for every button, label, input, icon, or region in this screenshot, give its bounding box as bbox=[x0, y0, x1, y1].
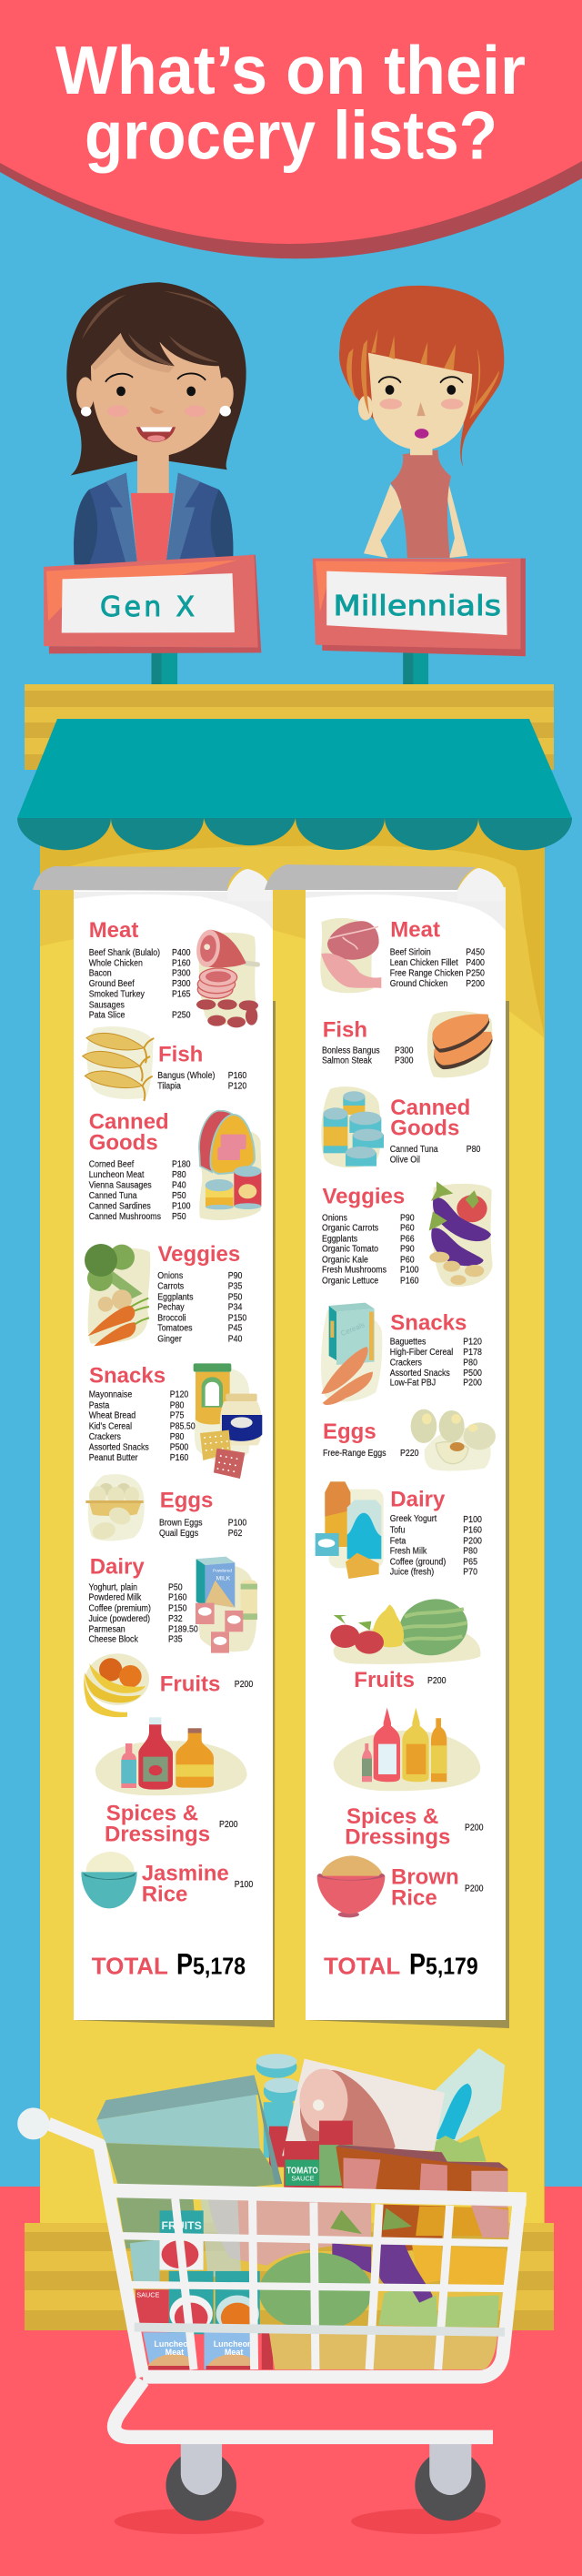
section: Fruits: Fruits bbox=[160, 1672, 220, 1696]
section: Fruits: P200 bbox=[235, 1679, 254, 1690]
sign: Gen X bbox=[44, 555, 261, 684]
section: Fish: P300 bbox=[395, 1046, 414, 1056]
section: Snacks: Baguettes bbox=[390, 1337, 426, 1348]
section: Spices & Dressings: P200 bbox=[219, 1819, 238, 1830]
section: Veggies: P60 bbox=[400, 1223, 415, 1234]
section: Snacks: P120 bbox=[463, 1337, 482, 1348]
section: Dairy bbox=[316, 1481, 482, 1579]
section: Meat: Beef Sirloin bbox=[390, 947, 431, 958]
section: Veggies: P100 bbox=[400, 1265, 419, 1276]
section: Veggies: P50 bbox=[228, 1292, 243, 1303]
icon: eggplants, tomato and mushrooms bbox=[429, 1181, 493, 1287]
section: Dairy: Powdered Milk bbox=[89, 1592, 141, 1603]
section: Snacks: Assorted Snacks bbox=[89, 1442, 149, 1453]
section: Canned Goods: P180 bbox=[172, 1159, 191, 1170]
sign: Millennials: Millennials bbox=[333, 591, 501, 622]
icon: bowl of brown rice bbox=[317, 1855, 385, 1917]
total: Gen X: P bbox=[176, 1947, 193, 1980]
character: Millennial woman bbox=[339, 286, 504, 558]
section: Snacks: P500 bbox=[170, 1442, 189, 1453]
section: Dairy: Juice (fresh) bbox=[390, 1567, 434, 1578]
section: Spices & Dressings bbox=[345, 1804, 484, 1850]
icon: cereal box and baguettes bbox=[321, 1303, 382, 1405]
section: Meat: P300 bbox=[172, 978, 191, 989]
section: Spices & Dressings bbox=[105, 1802, 238, 1846]
section: Eggs: Quail Eggs bbox=[159, 1528, 198, 1539]
section: Snacks: Peanut Butter bbox=[89, 1452, 138, 1463]
section: Canned Goods bbox=[89, 1110, 262, 1222]
section: Snacks: Crackers bbox=[390, 1358, 422, 1369]
section: Meat: P160 bbox=[172, 958, 191, 969]
icon: cereal box and baguettes: Cereals bbox=[339, 1320, 366, 1338]
section: Meat: Ground Beef bbox=[89, 978, 135, 989]
section: Canned Goods: Corned Beef bbox=[89, 1159, 134, 1170]
icon: stacked cans bbox=[321, 1086, 384, 1167]
section: Meat: Smoked Turkey bbox=[89, 989, 145, 1000]
section: Meat: Bacon bbox=[89, 968, 112, 979]
section: Canned Goods: Canned Tuna bbox=[390, 1144, 438, 1155]
section: Fish bbox=[83, 1026, 247, 1101]
total: Gen X: TOTAL bbox=[92, 1952, 168, 1979]
section: Veggies: Carrots bbox=[157, 1281, 184, 1292]
shopping list: Millennials bbox=[265, 864, 509, 2028]
section: Meat: P400 bbox=[172, 947, 191, 958]
section: Fruits bbox=[330, 1594, 480, 1692]
section: Fish: Fish bbox=[323, 1017, 367, 1042]
section: Veggies: P90 bbox=[400, 1213, 415, 1224]
section: Fish: Fish bbox=[158, 1043, 203, 1067]
section: Eggs: P62 bbox=[228, 1528, 242, 1539]
title: grocery lists? bbox=[85, 96, 497, 173]
section: Meat: Pata Slice bbox=[89, 1010, 125, 1021]
section: Jasmine Rice: Jasmine bbox=[142, 1862, 229, 1886]
section: Spices & Dressings: Spices & bbox=[106, 1802, 198, 1826]
section: Veggies: P35 bbox=[228, 1281, 242, 1292]
section: Dairy: Greek Yogurt bbox=[390, 1513, 436, 1524]
section: Dairy: Cheese Block bbox=[89, 1634, 138, 1645]
icon: jars and crackers bbox=[194, 1363, 262, 1479]
section: Veggies: Organic Tomato bbox=[322, 1244, 378, 1255]
icon: beef and chicken bbox=[320, 918, 381, 993]
sign: Millennials bbox=[313, 559, 526, 684]
icon: powdered milk and cups: Powdered bbox=[213, 1568, 232, 1572]
section: Snacks: P160 bbox=[170, 1452, 189, 1463]
groceries: Meat bbox=[166, 2348, 184, 2357]
section: Dairy: P35 bbox=[168, 1634, 183, 1645]
section: Canned Goods: P40 bbox=[172, 1180, 186, 1191]
section: Brown Rice: Rice bbox=[391, 1885, 437, 1910]
groceries: FRUITS bbox=[162, 2219, 202, 2232]
section: Eggs: Eggs bbox=[160, 1489, 213, 1513]
section: Canned Goods: Canned Tuna bbox=[89, 1190, 137, 1201]
section: Veggies: Veggies bbox=[322, 1184, 405, 1208]
icon: three fish bbox=[83, 1026, 154, 1101]
section: Snacks bbox=[321, 1303, 482, 1405]
paper bbox=[265, 864, 509, 2028]
groceries: Luncheon bbox=[154, 2339, 193, 2349]
section: Spices & Dressings: Dressings bbox=[105, 1822, 210, 1846]
groceries bbox=[96, 2048, 508, 2369]
cart handle knob bbox=[17, 2107, 49, 2139]
section: Veggies: Broccoli bbox=[157, 1313, 186, 1324]
section: Dairy: Juice (powdered) bbox=[89, 1613, 150, 1624]
wheels bbox=[166, 2444, 486, 2520]
section: Veggies: Eggplants bbox=[322, 1234, 357, 1245]
section: Dairy: P70 bbox=[463, 1567, 478, 1578]
section: Snacks: Pasta bbox=[89, 1400, 110, 1411]
icon: broccoli and carrots bbox=[85, 1244, 150, 1346]
section: Snacks: Low-Fat PBJ bbox=[390, 1378, 436, 1389]
section: Eggs: Eggs bbox=[323, 1419, 376, 1444]
section: Veggies: P66 bbox=[400, 1234, 415, 1245]
section: Veggies: P40 bbox=[228, 1334, 243, 1345]
section: Meat: P250 bbox=[466, 968, 485, 979]
shopping cart bbox=[17, 2048, 527, 2534]
icon: eggs bbox=[411, 1409, 496, 1470]
icon: spices and sauces bbox=[95, 1717, 247, 1795]
section: Snacks: P200 bbox=[463, 1378, 482, 1389]
section: Fish: P300 bbox=[395, 1056, 414, 1066]
section: Fish: Bonless Bangus bbox=[322, 1046, 380, 1056]
section: Dairy: P160 bbox=[168, 1592, 187, 1603]
character: Gen X woman bbox=[66, 282, 246, 564]
section: Meat: P200 bbox=[466, 978, 485, 989]
section: Dairy: Dairy bbox=[390, 1488, 446, 1512]
section: Canned Goods: P80 bbox=[467, 1144, 481, 1155]
section: Eggs bbox=[323, 1409, 496, 1470]
section: Canned Goods: Goods bbox=[390, 1116, 459, 1141]
section: Veggies: Fresh Mushrooms bbox=[322, 1265, 386, 1276]
section: Meat bbox=[89, 918, 258, 1027]
section: Snacks bbox=[89, 1363, 262, 1479]
shopping list: Gen X bbox=[33, 866, 276, 2027]
total: Millennials: 5,179 bbox=[426, 1952, 478, 1979]
icon: salmon steaks bbox=[427, 1011, 493, 1077]
section: Canned Goods: Goods bbox=[89, 1130, 158, 1155]
section: Canned Goods: Vienna Sausages bbox=[89, 1180, 152, 1191]
total: Millennials bbox=[324, 1947, 478, 1980]
section: Veggies: P60 bbox=[400, 1255, 415, 1266]
section: Spices & Dressings: P200 bbox=[465, 1823, 484, 1834]
section: Brown Rice: P200 bbox=[465, 1884, 484, 1894]
section: Veggies bbox=[85, 1242, 247, 1346]
section: Veggies: P160 bbox=[400, 1276, 419, 1287]
section: Veggies: Pechay bbox=[157, 1302, 185, 1313]
section: Veggies: P90 bbox=[228, 1270, 243, 1281]
title bbox=[55, 32, 526, 173]
section: Veggies: P150 bbox=[228, 1313, 247, 1324]
section: Jasmine Rice: P100 bbox=[235, 1879, 254, 1890]
section: Dairy: P50 bbox=[168, 1582, 183, 1593]
section: Canned Goods: Canned Sardines bbox=[89, 1201, 151, 1212]
section: Dairy: Fresh Milk bbox=[390, 1546, 426, 1557]
section: Eggs: P220 bbox=[400, 1448, 419, 1459]
total: Millennials: TOTAL bbox=[324, 1952, 400, 1979]
section: Fish: P160 bbox=[228, 1070, 247, 1081]
section: Meat: Lean Chicken Fillet bbox=[390, 957, 458, 968]
icon: ham and sausages bbox=[195, 928, 258, 1027]
section: Fruits: P200 bbox=[427, 1675, 447, 1686]
section: Canned Goods: Olive Oil bbox=[390, 1155, 420, 1166]
icon: condiment bottles bbox=[334, 1708, 480, 1791]
section: Snacks: Kid’s Cereal bbox=[89, 1421, 132, 1432]
section: Dairy: P100 bbox=[463, 1514, 482, 1525]
store body bbox=[40, 814, 545, 2227]
section: Snacks: Snacks bbox=[390, 1311, 467, 1336]
section: Dairy: Dairy bbox=[90, 1554, 145, 1579]
paper bbox=[33, 866, 276, 2027]
section: Veggies: Onions bbox=[157, 1270, 183, 1281]
section: Veggies: Veggies bbox=[158, 1242, 240, 1267]
groceries: SAUCE bbox=[291, 2175, 315, 2183]
section: Meat: Sausages bbox=[89, 1000, 125, 1011]
title: What’s on their bbox=[55, 32, 526, 108]
section: Meat bbox=[320, 917, 485, 993]
section: Canned Goods: Canned Mushrooms bbox=[89, 1211, 161, 1222]
section: Snacks: Wheat Bread bbox=[89, 1410, 135, 1421]
icon: egg carton bbox=[85, 1474, 145, 1541]
total: Millennials: P bbox=[409, 1947, 426, 1980]
icon: apples, pear and watermelon bbox=[330, 1594, 480, 1664]
section: Canned Goods bbox=[321, 1086, 481, 1167]
total: Gen X: 5,178 bbox=[193, 1952, 246, 1979]
section: Dairy: P80 bbox=[463, 1546, 478, 1557]
awning bbox=[17, 719, 572, 850]
section: Meat: P450 bbox=[466, 947, 485, 958]
section: Dairy: Coffee (ground) bbox=[390, 1557, 446, 1568]
wheel shadows bbox=[115, 2509, 501, 2534]
groceries: TOMATO bbox=[286, 2167, 318, 2177]
store fascia bbox=[25, 684, 554, 770]
section: Canned Goods: Luncheon Meat bbox=[89, 1169, 145, 1180]
section: Meat: P250 bbox=[172, 1010, 191, 1021]
section: Eggs: Brown Eggs bbox=[159, 1518, 203, 1529]
section: Meat: Meat bbox=[89, 918, 138, 943]
section: Canned Goods: P50 bbox=[172, 1190, 186, 1201]
section: Snacks: P85.50 bbox=[170, 1421, 196, 1432]
section: Snacks: Snacks bbox=[89, 1363, 166, 1388]
section: Snacks: P75 bbox=[170, 1410, 184, 1421]
section: Fish: P120 bbox=[228, 1081, 247, 1092]
sign pole bbox=[403, 652, 428, 684]
section: Veggies: Eggplants bbox=[157, 1292, 194, 1303]
section: Snacks: P80 bbox=[170, 1431, 185, 1442]
section: Meat: Beef Shank (Bulalo) bbox=[89, 947, 160, 958]
section: Jasmine Rice: Rice bbox=[142, 1882, 187, 1906]
groceries: Meat bbox=[225, 2348, 243, 2357]
section: Fish: Bangus (Whole) bbox=[157, 1070, 215, 1081]
sign: Gen X: Gen X bbox=[100, 591, 195, 623]
section: Meat: P300 bbox=[172, 968, 191, 979]
icon: bananas and oranges bbox=[84, 1653, 149, 1717]
icon: canned meat bbox=[199, 1111, 262, 1220]
section: Fruits bbox=[84, 1653, 254, 1717]
section: Brown Rice: Brown bbox=[391, 1865, 459, 1890]
section: Meat: Whole Chicken bbox=[89, 958, 143, 969]
section: Meat: P400 bbox=[466, 957, 485, 968]
section: Veggies: Organic Lettuce bbox=[322, 1276, 378, 1287]
cart frame bbox=[48, 2124, 527, 2437]
section: Snacks: High-Fiber Cereal bbox=[390, 1347, 453, 1358]
section: Dairy: P65 bbox=[463, 1557, 477, 1568]
section: Fish: Salmon Steak bbox=[322, 1056, 372, 1066]
store base bbox=[25, 2223, 554, 2330]
section: Canned Goods: P50 bbox=[172, 1211, 186, 1222]
section: Snacks: P80 bbox=[463, 1358, 478, 1369]
section: Brown Rice bbox=[317, 1855, 484, 1917]
section: Snacks: Assorted Snacks bbox=[390, 1368, 450, 1379]
section: Meat: Meat bbox=[390, 917, 440, 942]
section: Meat: Free Range Chicken bbox=[390, 968, 464, 979]
section: Veggies: P45 bbox=[228, 1323, 242, 1334]
section: Fish bbox=[322, 1011, 493, 1077]
section: Veggies bbox=[322, 1181, 493, 1287]
section: Veggies: Organic Kale bbox=[322, 1255, 368, 1266]
section: Fish: Tilapia bbox=[157, 1081, 181, 1092]
sign pole bbox=[152, 652, 177, 684]
section: Veggies: Organic Carrots bbox=[322, 1223, 378, 1234]
groceries: SAUCE bbox=[136, 2290, 160, 2298]
section: Veggies: P34 bbox=[228, 1302, 243, 1313]
section: Snacks: P80 bbox=[170, 1400, 185, 1411]
section: Eggs bbox=[85, 1474, 247, 1541]
icon: powdered milk and cups: MILK bbox=[216, 1576, 231, 1582]
section: Canned Goods: P100 bbox=[172, 1201, 191, 1212]
section: Jasmine Rice bbox=[81, 1852, 254, 1908]
section: Veggies: P90 bbox=[400, 1244, 415, 1255]
section: Dairy bbox=[89, 1554, 257, 1653]
section: Veggies: Onions bbox=[322, 1213, 347, 1224]
section: Dairy: Coffee (premium) bbox=[89, 1603, 151, 1614]
header banner bbox=[0, 0, 582, 258]
background: floor bbox=[0, 2187, 582, 2576]
section: Meat: Ground Chicken bbox=[390, 978, 447, 989]
section: Dairy: Parmesan bbox=[89, 1624, 125, 1635]
section: Dairy: Tofu bbox=[390, 1525, 405, 1536]
icon: powdered milk and cups bbox=[196, 1557, 257, 1653]
section: Snacks: P120 bbox=[170, 1389, 189, 1400]
icon: bowl of jasmine rice bbox=[81, 1852, 137, 1908]
section: Eggs: Free-Range Eggs bbox=[323, 1448, 386, 1459]
section: Veggies: Tomatoes bbox=[157, 1323, 193, 1334]
section: Canned Goods: P80 bbox=[172, 1169, 186, 1180]
section: Dairy: P150 bbox=[168, 1603, 187, 1614]
section: Dairy: P32 bbox=[168, 1613, 183, 1624]
section: Veggies: Ginger bbox=[157, 1334, 182, 1345]
section: Dairy: Yoghurt, plain bbox=[89, 1582, 137, 1593]
section: Dairy: Feta bbox=[390, 1536, 406, 1547]
section: Spices & Dressings: Dressings bbox=[345, 1825, 450, 1850]
section: Spices & Dressings: Spices & bbox=[346, 1804, 438, 1829]
section: Snacks: Crackers bbox=[89, 1431, 121, 1442]
section: Canned Goods: Canned bbox=[390, 1096, 470, 1120]
icon: milk cartons and cheese bbox=[316, 1481, 384, 1579]
section: Fruits: Fruits bbox=[354, 1668, 415, 1692]
section: Snacks: P500 bbox=[463, 1368, 482, 1379]
section: Meat: P165 bbox=[172, 989, 191, 1000]
section: Dairy: P160 bbox=[463, 1525, 482, 1536]
section: Snacks: P178 bbox=[463, 1347, 482, 1358]
section: Snacks: Mayonnaise bbox=[89, 1389, 132, 1400]
groceries: Luncheon bbox=[214, 2339, 253, 2349]
section: Eggs: P100 bbox=[228, 1518, 247, 1529]
section: Canned Goods: Canned bbox=[89, 1110, 169, 1135]
total: Gen X bbox=[92, 1947, 246, 1980]
section: Dairy: P200 bbox=[463, 1536, 482, 1547]
section: Dairy: P189.50 bbox=[168, 1624, 198, 1635]
